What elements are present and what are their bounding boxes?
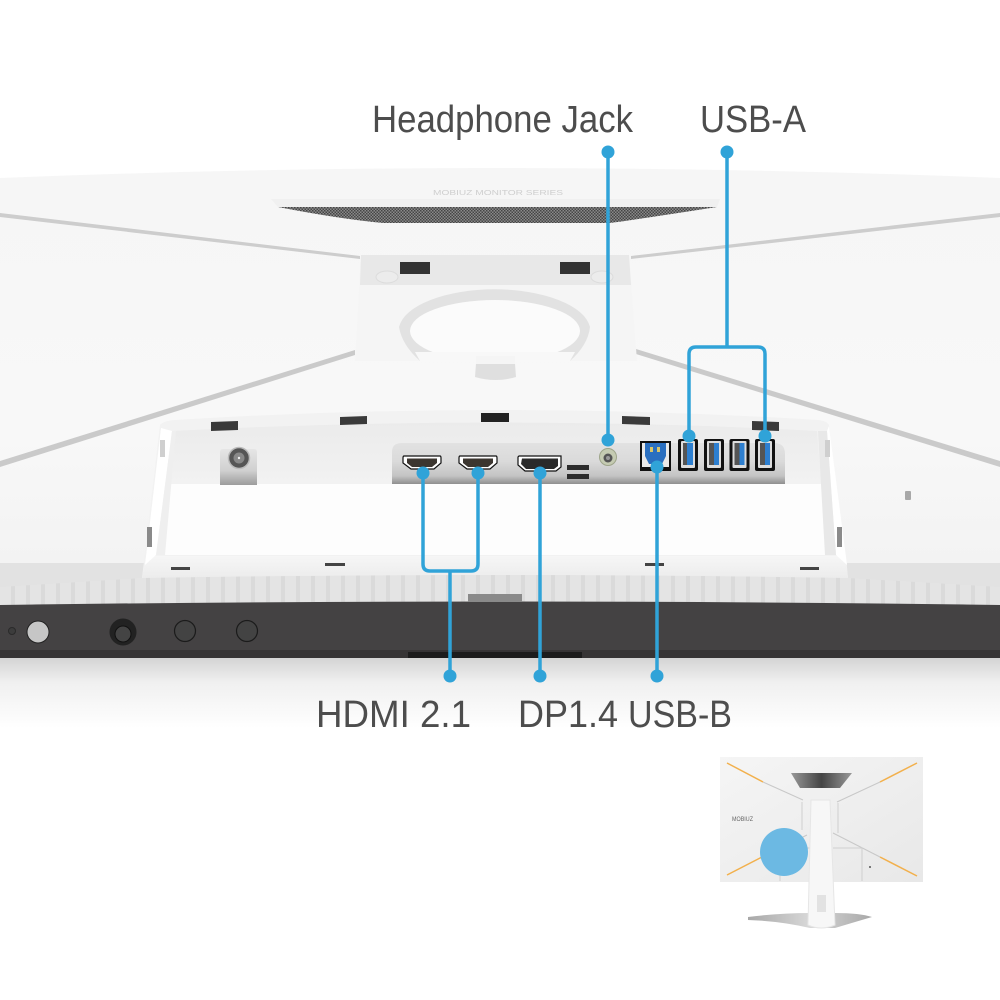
monitor rear photo [0, 168, 1000, 728]
speaker vent [271, 190, 720, 223]
USB-A ports [678, 439, 775, 471]
label: Headphone Jack: Headphone Jack [372, 99, 634, 141]
dark lower bezel [0, 594, 1000, 660]
label: DP1.4: DP1.4 [518, 694, 618, 736]
stand tab [475, 356, 516, 380]
USB-B port [640, 441, 671, 471]
port tray [142, 410, 848, 578]
DisplayPort port [518, 456, 561, 471]
connector strip [392, 443, 785, 484]
HDMI port 1 [403, 456, 441, 469]
thumbnail orange accents [727, 763, 917, 876]
thumbnail stand [808, 800, 835, 928]
bottom shadow [0, 658, 1000, 728]
upper right seam [631, 213, 1000, 259]
label: HDMI 2.1: HDMI 2.1 [316, 694, 471, 736]
leader: headphone jack [602, 146, 614, 446]
tray lip slots [171, 563, 819, 570]
lower right seam [636, 349, 1000, 467]
thumbnail stand slot [817, 895, 826, 912]
leader: HDMI [416, 466, 484, 682]
lower left seam [0, 350, 355, 467]
leader: USB-B [650, 460, 664, 682]
tray front lip [142, 556, 848, 578]
shell lower shaded band [0, 563, 1000, 590]
menu button [236, 620, 258, 642]
tray top clips [211, 413, 779, 431]
LED indicator [8, 628, 16, 634]
stand mount recess [355, 255, 637, 380]
label: USB-A: USB-A [700, 99, 807, 141]
tray side latches [147, 440, 842, 547]
power socket [220, 448, 257, 485]
mount screw bosses [376, 271, 613, 283]
bezel slot [408, 652, 582, 660]
leader: USB-A [682, 146, 772, 442]
left tray wall [145, 428, 172, 565]
vent slots [567, 465, 589, 479]
stand notch [468, 594, 522, 602]
monitor back shell [0, 168, 1000, 610]
tray back wall [166, 422, 821, 484]
locator thumbnail [720, 757, 923, 928]
thumbnail highlight circle [760, 828, 808, 876]
menu button [174, 620, 196, 642]
stand socket [399, 289, 590, 362]
ribbed vent band [0, 575, 1000, 606]
joystick [110, 618, 136, 646]
thumbnail vent [791, 773, 852, 788]
tray floor [156, 484, 826, 555]
right tray wall [827, 426, 847, 565]
power button [27, 621, 49, 643]
upper left seam [0, 213, 360, 259]
thumbnail logo: MOBIUZ [732, 817, 753, 823]
thumbnail base [748, 913, 872, 928]
label: USB-B: USB-B [628, 694, 732, 736]
speaker vent: MOBIUZ MONITOR SERIES [433, 190, 563, 197]
leader: DP [534, 466, 546, 682]
thumbnail screen back [720, 757, 923, 882]
thumbnail rear dot [869, 866, 871, 868]
mount clips [400, 262, 590, 274]
tray frame [142, 410, 848, 578]
HDMI port 2 [459, 456, 497, 469]
thumbnail seams [762, 782, 880, 881]
lock slot [905, 491, 911, 500]
headphone jack socket [600, 448, 616, 466]
